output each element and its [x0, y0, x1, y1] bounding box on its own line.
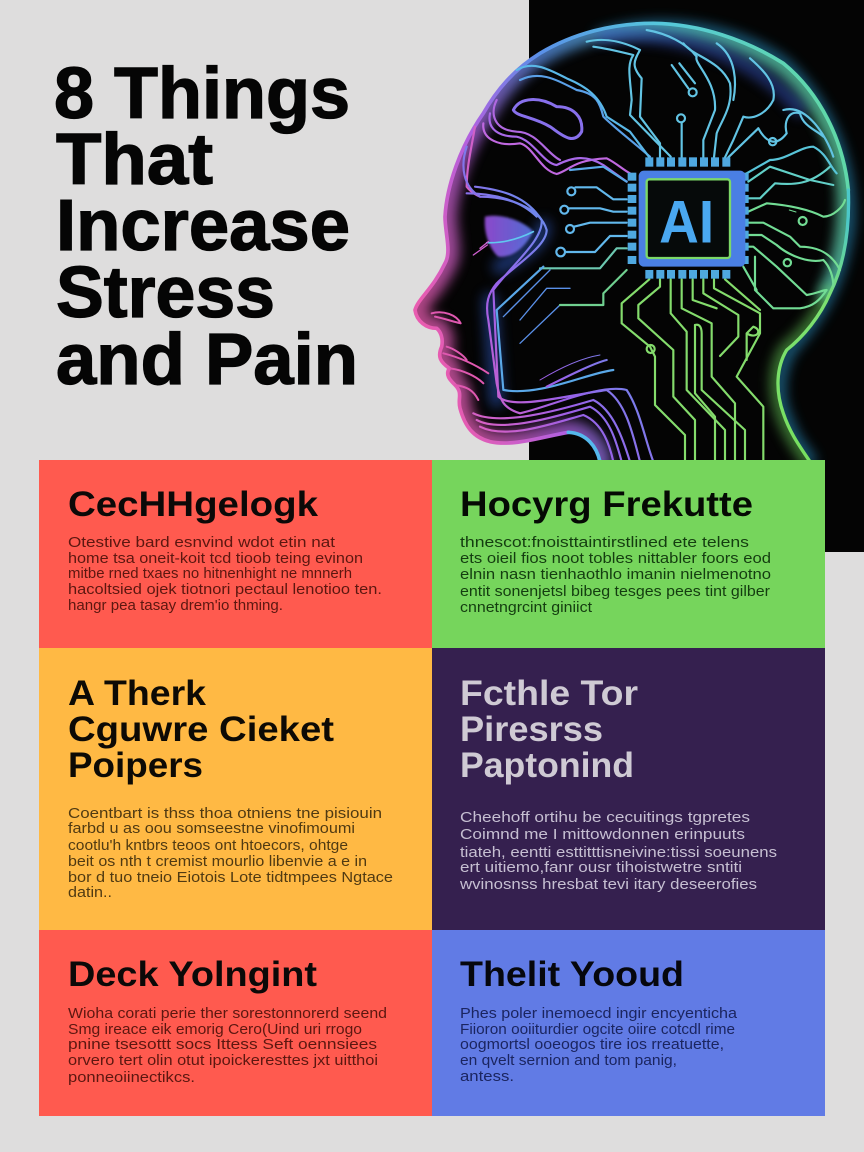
panel heading: Fcthle Tor	[460, 674, 638, 713]
brain fold lines	[467, 30, 837, 197]
panel body text: thnescot:fnoisttaintirstlined ete telens	[460, 534, 749, 551]
panel heading: Poipers	[68, 746, 203, 785]
panel heading: Paptonind	[460, 746, 634, 785]
panel body text: beit os nth t cremist mourlio libenvie a e in	[68, 853, 367, 870]
AI chip	[628, 157, 749, 279]
illustration: AI head with circuit brain	[415, 23, 849, 462]
black backdrop panel	[529, 0, 864, 552]
panel body text: ponneoiinectikcs.	[68, 1069, 195, 1086]
panel body text: cnnetngrcint giniict	[460, 599, 593, 616]
chip pins	[628, 157, 749, 279]
panel body text	[68, 805, 393, 901]
panel body text: antess.	[460, 1068, 514, 1085]
title: Stress	[56, 253, 275, 333]
panel body text: Otestive bard esnvind wdot etin nat	[68, 534, 336, 551]
title: 8 Things	[54, 54, 350, 134]
panel heading: Piresrss	[460, 710, 603, 749]
panel body text	[68, 534, 382, 614]
panel body text: ets oieil fios noot tobles nittabler foors eod	[460, 550, 771, 567]
panel body text: home tsa oneit-koit tcd tioob teing evinon	[68, 550, 363, 567]
panel: purple middle-right	[432, 648, 825, 930]
panel body text: tiateh, eentti esttitttisneivine:tissi soeunens	[460, 844, 777, 861]
panel: red bottom-left	[39, 930, 432, 1116]
panel: blue bottom-right	[432, 930, 825, 1116]
AI chip: AI	[659, 189, 714, 256]
panel body text: elnin nasn tienhaothlo imanin nielmenotno	[460, 566, 771, 583]
panel body text: datin..	[68, 884, 112, 901]
panel body text	[459, 809, 777, 893]
title: Increase	[56, 186, 350, 266]
head silhouette	[415, 23, 849, 462]
panel body text: Phes poler inemoecd ingir encyenticha	[460, 1005, 738, 1022]
panel body text: pnine tsesottt socs Ittess Seft oennsiees	[68, 1036, 377, 1053]
panel heading: Deck Yolngint	[68, 955, 317, 994]
eye	[473, 216, 533, 257]
lower circuit traces	[622, 279, 763, 462]
right chip traces	[743, 167, 845, 308]
panel: red top-left	[39, 460, 432, 648]
panel body text: Smg ireace eik emorig Cero(Uind uri rrogo	[68, 1021, 362, 1038]
panel body text: cootlu'h kntbrs teoos ont htoecors, ohtge	[68, 837, 348, 854]
panel body text: Coimnd me I mittowdonnen erinpuuts	[460, 826, 745, 843]
panel heading: CecHHgelogk	[68, 485, 319, 524]
panel body text: oogmortsl ooeogos tire ios rreatuette,	[460, 1036, 724, 1053]
panel body text: ert uitiemo,fanr ousr tihoistwetre sntiti	[460, 859, 742, 876]
panel body text: en qvelt sernion and tom panig,	[460, 1052, 677, 1069]
inner rim glow	[415, 23, 849, 462]
panel body text: entit sonenjetsl bibeg tesges pees tint gilber	[460, 583, 770, 600]
panel body text	[460, 534, 771, 616]
panel body text: Wioha corati perie ther sorestonnorerd seend	[68, 1005, 387, 1022]
head outer glow	[600, 27, 849, 460]
title	[54, 54, 358, 400]
panel heading: Hocyrg Frekutte	[460, 485, 753, 524]
left chip traces	[497, 167, 627, 391]
panel: green top-right	[432, 460, 825, 648]
panel body text: bor d tuo tneio Eiotois Lote tidtmpees Ngtace	[68, 869, 393, 886]
panel heading	[460, 674, 638, 785]
panel body text	[460, 1005, 738, 1085]
panel: yellow middle-left	[39, 648, 432, 930]
panel body text: hacoltsied ojek tiotnori pectaul lenotioo ten.	[68, 581, 382, 598]
panel heading: Cguwre Cieket	[68, 710, 334, 749]
panel body text: wvinosnss hresbat tevi itary deseerofies	[459, 876, 757, 893]
panel body text: Cheehoff ortihu be cecuitings tgpretes	[460, 809, 750, 826]
panel heading: A Therk	[68, 674, 207, 713]
panel body text: Fiioron ooiiturdier ogcite oiire cotcdl rime	[460, 1021, 735, 1038]
title: and Pain	[56, 320, 358, 400]
panel heading	[68, 674, 334, 785]
panel body text	[68, 1005, 387, 1086]
panel body text: hangr pea tasay drem'io thming.	[68, 597, 283, 614]
panel body text: Coentbart is thss thoa otniens tne pisiouin	[68, 805, 382, 822]
title: That	[56, 120, 213, 200]
panel body text: mitbe rned txaes no hitnenhight ne mnnerh	[68, 565, 352, 582]
head outline	[415, 23, 849, 462]
face contour lines	[463, 147, 653, 462]
panel heading: Thelit Yooud	[460, 955, 684, 994]
panel body text: orvero tert olin otut ipoickeresttes jxt uitthoi	[68, 1052, 378, 1069]
panel body text: farbd u as oou somseestne vinofimoumi	[68, 820, 355, 837]
nose and lips	[432, 312, 488, 400]
